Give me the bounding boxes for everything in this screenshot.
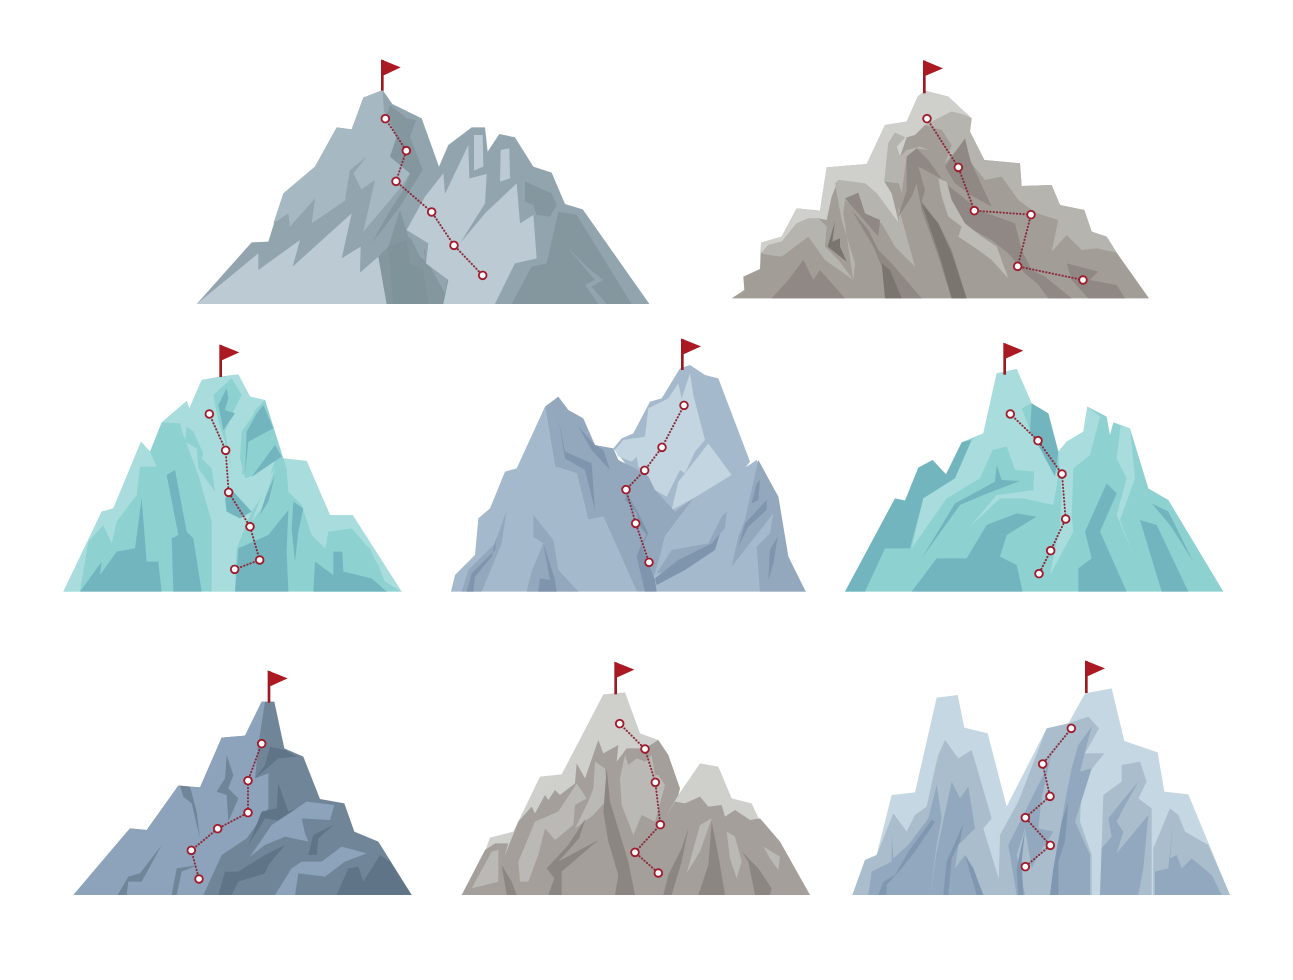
mountain 6: slate blue peak [73,670,412,895]
climbing route [381,115,486,279]
mountain 1: grey double peak [197,59,649,304]
mountain 5: teal wide peak [845,343,1223,592]
flag [268,670,288,703]
climbing route [1006,410,1069,577]
flag [1085,660,1105,693]
flag [923,60,943,93]
flag [681,338,701,370]
flag [614,662,634,694]
climbing route [205,410,263,573]
climbing route [622,401,688,566]
flag [219,344,239,377]
mountain 3: teal peak [63,344,402,592]
mountain 8: pale blue twin peaks [852,660,1230,895]
climbing route [923,115,1087,284]
flag [1003,343,1023,375]
mountain 4: blue double peak [451,338,806,592]
flag [381,59,401,91]
mountain 7: brown peak with snow cap [462,662,810,895]
climbing route [1021,724,1075,870]
mountain 2: brown rocky peak [732,60,1149,298]
climbing route [187,740,265,883]
climbing route [616,720,664,877]
